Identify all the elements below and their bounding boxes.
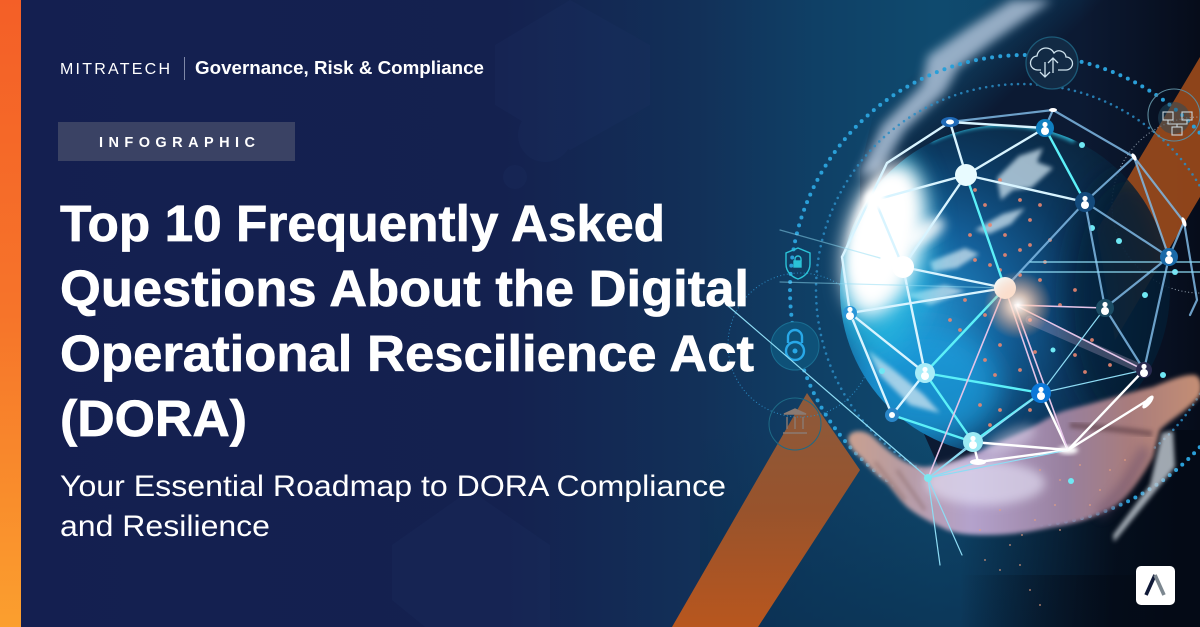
orange diagonal stripe: upper	[1097, 57, 1200, 340]
bright ocean	[850, 325, 1000, 445]
shirt cuff	[1113, 431, 1175, 542]
title: (DORA)	[60, 390, 247, 447]
subtitle	[60, 470, 726, 543]
brand header: Governance, Risk & Compliance	[195, 58, 484, 78]
white glare	[828, 155, 940, 325]
brand header	[60, 57, 484, 80]
icon: shield	[786, 248, 810, 279]
shirt collar	[858, 0, 1052, 176]
cyan halo	[820, 135, 930, 355]
top rim glow	[930, 123, 1075, 140]
network mesh lines	[727, 110, 1200, 565]
orange side bar	[0, 0, 21, 627]
network nodes	[843, 108, 1188, 482]
tag: infographic: INFOGRAPHIC	[99, 135, 256, 151]
brand header: MITRATECH	[60, 61, 170, 78]
clouds	[868, 148, 1053, 413]
title	[60, 195, 754, 447]
orange diagonal stripe: lower	[672, 393, 860, 627]
hand	[848, 375, 1200, 535]
decorative hexagons	[392, 0, 650, 627]
suit backdrop	[700, 0, 1200, 627]
logo badge	[1136, 566, 1175, 605]
hand sparkle dots	[980, 460, 1125, 605]
globe	[820, 123, 1195, 455]
cyan sparkles	[879, 142, 1178, 484]
dotted orbit rings	[728, 55, 1200, 525]
tag: infographic	[58, 122, 295, 161]
icon: cloud	[1026, 37, 1078, 89]
icon: bank	[769, 398, 821, 450]
title: Top 10 Frequently Asked	[60, 195, 665, 252]
icon: network	[1148, 89, 1200, 141]
data points	[950, 180, 1110, 425]
icon: padlock	[771, 322, 819, 370]
dark side	[1052, 173, 1170, 402]
title: Operational Rescilience Act	[60, 325, 754, 382]
subtitle: and Resilience	[60, 510, 270, 543]
subtitle: Your Essential Roadmap to DORA Compliance	[60, 470, 726, 503]
title: Questions About the Digital	[60, 260, 749, 317]
